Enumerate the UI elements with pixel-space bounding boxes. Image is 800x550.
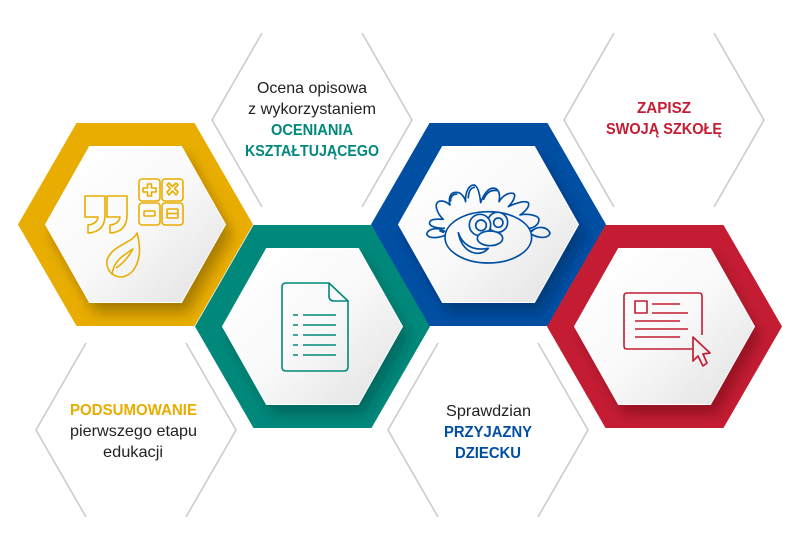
text: enrol school [606,100,722,138]
text: friendly test: DZIECKU [455,445,521,462]
panel: gold hexagon [18,123,253,326]
outline hexagon: friendly test [388,343,588,517]
icon: cartoon face [427,185,550,263]
outline hexagon: summary [36,343,236,517]
icon: document [282,283,348,371]
text: summary: edukacji [103,444,163,461]
text: friendly test [444,403,532,462]
text: assessment: OCENIANIA [271,122,353,139]
text: summary [70,402,197,461]
text: assessment: KSZTAŁTUJĄCEGO [245,143,379,160]
panel: teal hexagon [195,225,430,428]
icon: quotes, calculator and leaf [85,179,183,277]
text: assessment [245,80,379,160]
outline hexagon: assessment [212,33,412,207]
text: assessment: z wykorzystaniem [248,101,376,118]
text: enrol school: SWOJĄ SZKOŁĘ [606,121,722,138]
outline hexagon: enrol school [564,33,764,207]
icon: form with cursor [624,293,710,366]
text: assessment: Ocena opisowa [257,80,367,97]
text: friendly test: PRZYJAZNY [444,424,532,441]
text: summary: pierwszego etapu [70,423,197,440]
panel: blue hexagon [371,123,606,326]
text: enrol school: ZAPISZ [637,100,691,117]
panel: red hexagon [547,225,782,428]
text: summary: PODSUMOWANIE [70,402,197,419]
text: friendly test: Sprawdzian [446,403,531,420]
